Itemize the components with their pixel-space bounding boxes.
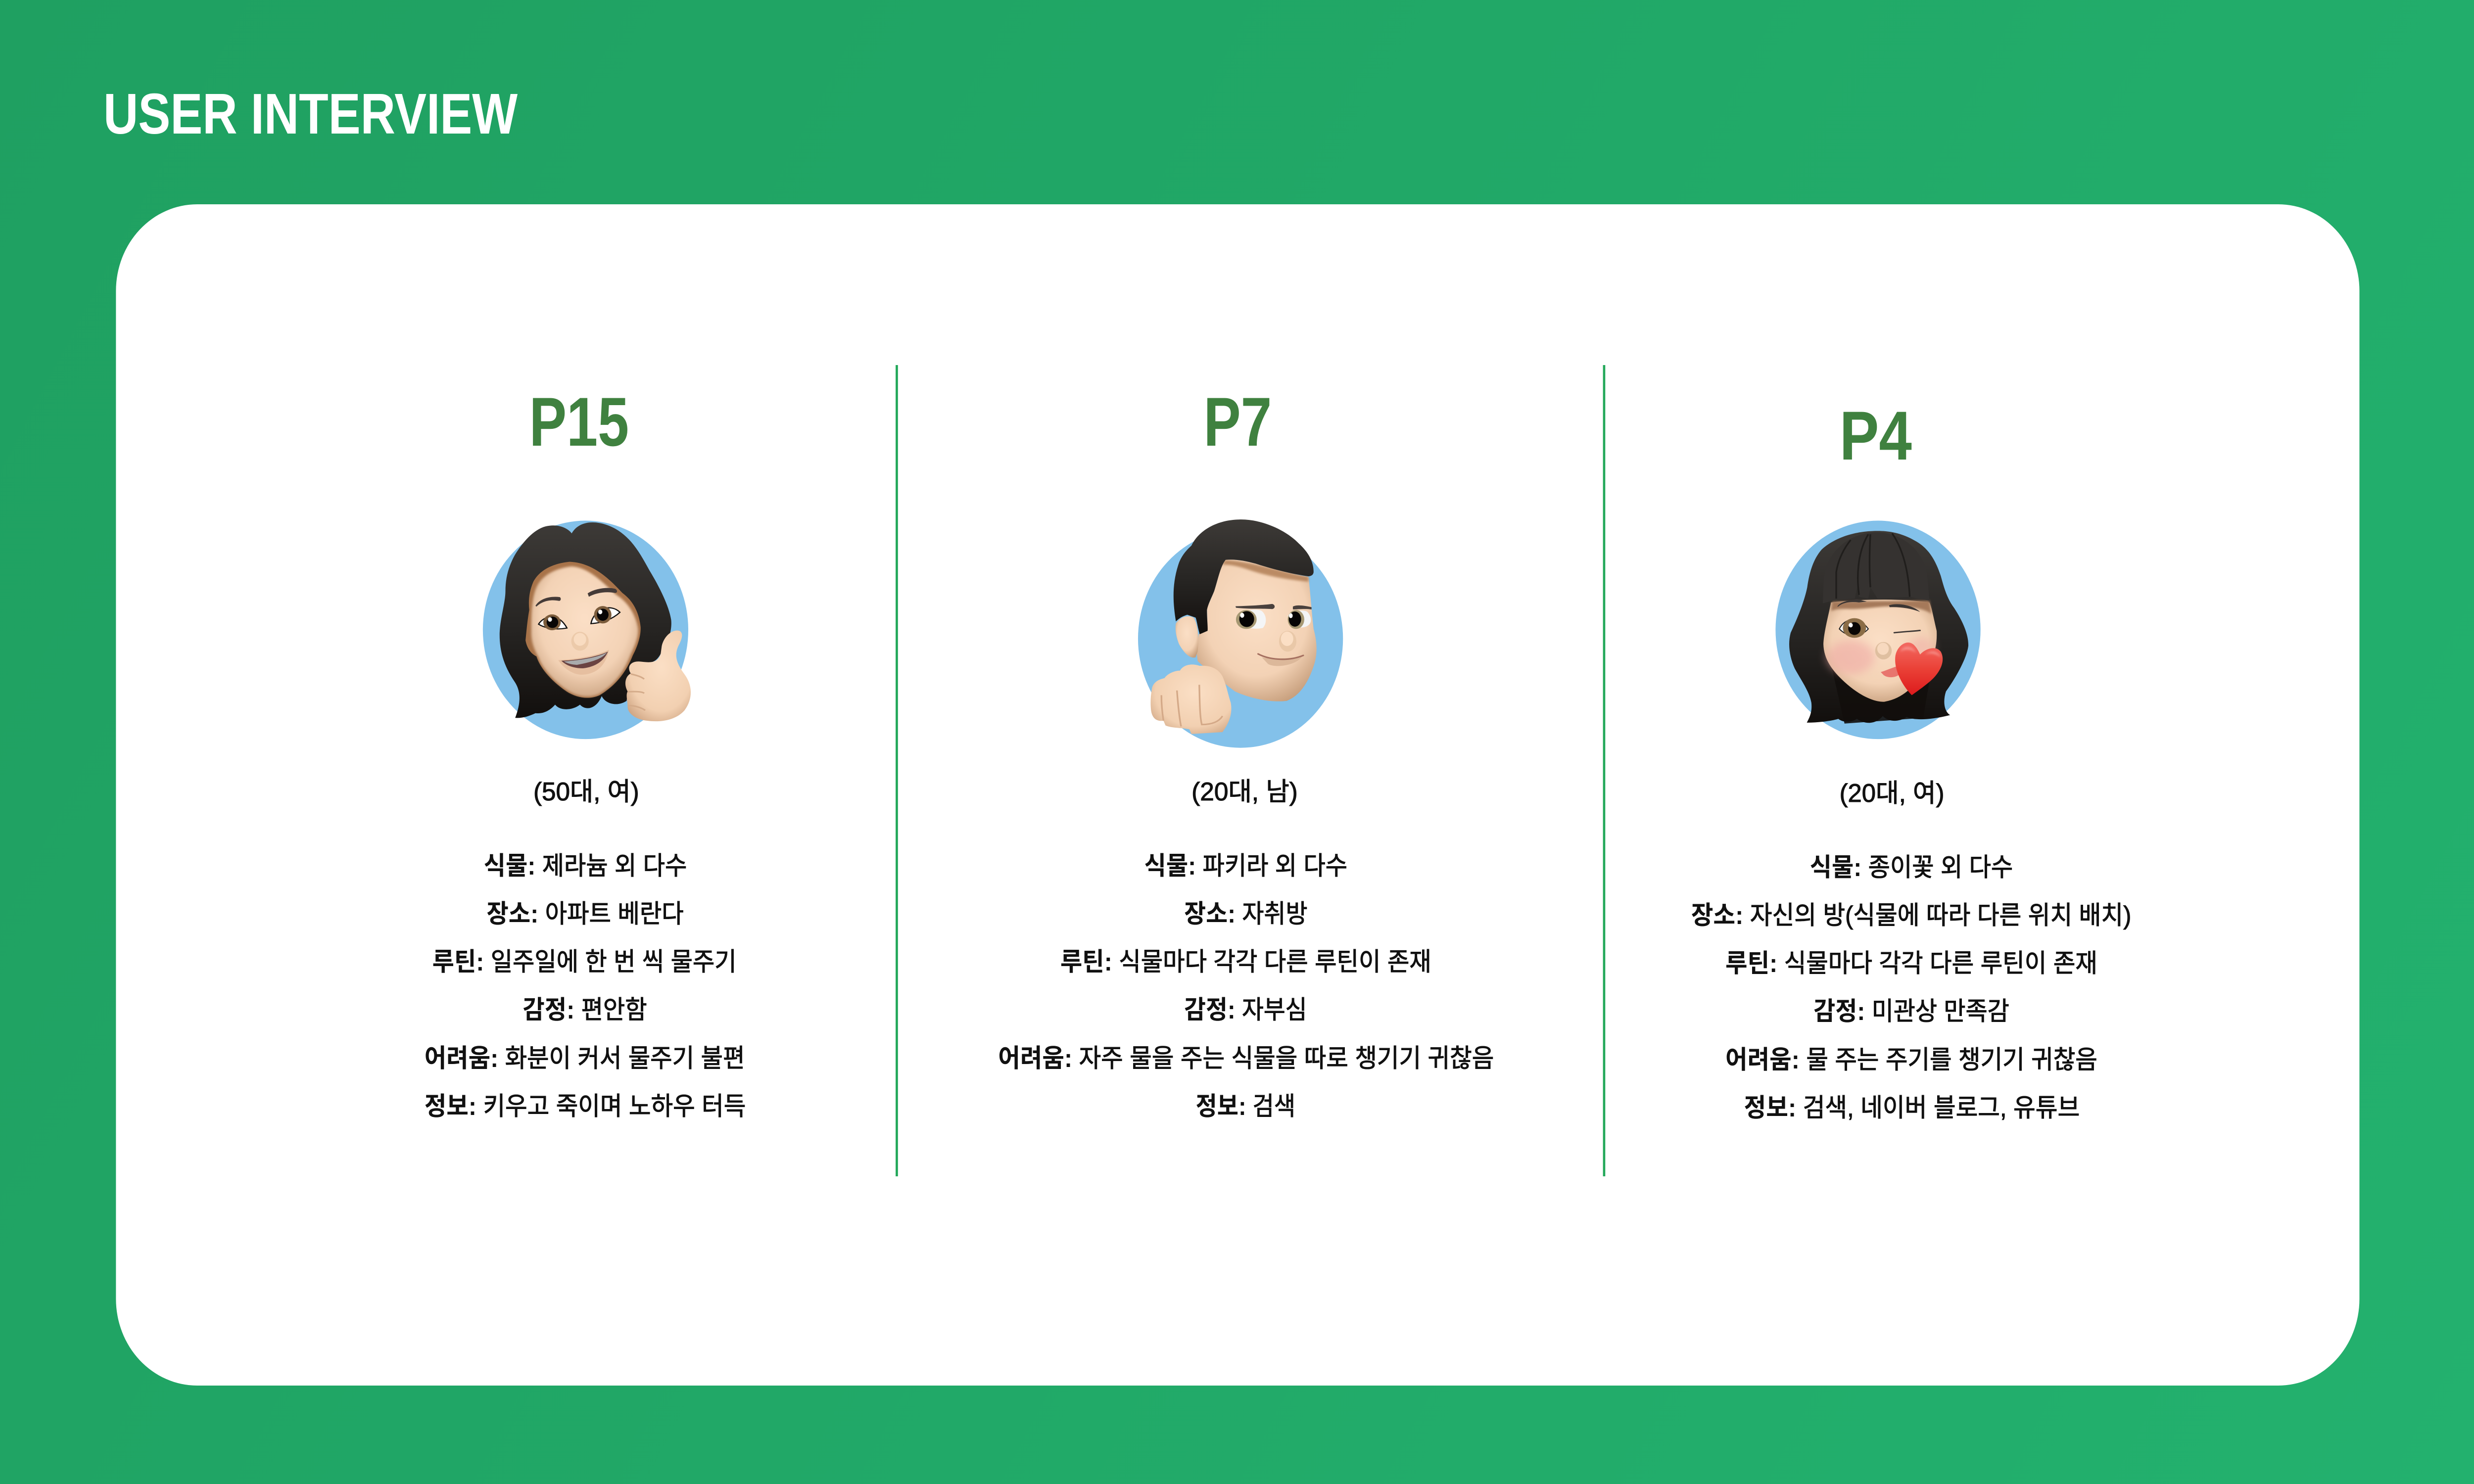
- details P7: 식물: 파키라 외 다수: [1144, 851, 1347, 880]
- details P7: 장소: 자취방: [1184, 899, 1307, 928]
- details P15: [425, 851, 746, 1120]
- title: USER INTERVIEW: [103, 82, 518, 146]
- white card panel: [116, 204, 2359, 1386]
- details P7: 어려움: 자주 물을 주는 식물을 따로 챙기기 귀찮음: [998, 1044, 1494, 1072]
- avatar P15: woman giving thumbs up: [483, 520, 691, 739]
- details P4: 장소: 자신의 방(식물에 따라 다른 위치 배치): [1691, 901, 2131, 929]
- details P4: 감정: 미관상 만족감: [1813, 997, 2009, 1025]
- details P15: 어려움: 화분이 커서 물주기 불편: [425, 1044, 745, 1072]
- panel: P7: [998, 383, 1494, 1120]
- details P15: 정보: 키우고 죽이며 노하우 터득: [425, 1092, 746, 1120]
- panel: P4: [1691, 397, 2131, 1122]
- details P15: 루틴: 일주일에 한 번 씩 물주기: [432, 947, 737, 976]
- details P7: 감정: 자부심: [1184, 995, 1307, 1024]
- avatar P4: woman blowing heart kiss: [1775, 520, 1981, 739]
- panel: P15: [425, 383, 746, 1120]
- age P7: (20대, 남): [1191, 777, 1298, 806]
- divider 1: [896, 365, 898, 1176]
- details P4: 루틴: 식물마다 각각 다른 루틴이 존재: [1725, 949, 2097, 977]
- details P7: 정보: 검색: [1196, 1092, 1295, 1120]
- heading P4: P4: [1840, 397, 1912, 474]
- details P15: 식물: 제라늄 외 다수: [484, 851, 687, 880]
- details P4: 식물: 종이꽃 외 다수: [1810, 853, 2013, 881]
- heading P15: P15: [529, 383, 629, 461]
- details P4: [1691, 853, 2131, 1122]
- divider 2: [1603, 365, 1605, 1176]
- details P15: 감정: 편안함: [523, 995, 647, 1024]
- age P4: (20대, 여): [1840, 779, 1945, 807]
- heading P7: P7: [1204, 383, 1272, 461]
- details P4: 정보: 검색, 네이버 블로그, 유튜브: [1744, 1093, 2080, 1122]
- avatar P7: man with fist bump: [1138, 519, 1343, 748]
- details P4: 어려움: 물 주는 주기를 챙기기 귀찮음: [1725, 1045, 2097, 1074]
- age P15: (50대, 여): [533, 777, 639, 806]
- details P7: [998, 851, 1494, 1120]
- details P7: 루틴: 식물마다 각각 다른 루틴이 존재: [1060, 947, 1431, 976]
- details P15: 장소: 아파트 베란다: [486, 899, 684, 928]
